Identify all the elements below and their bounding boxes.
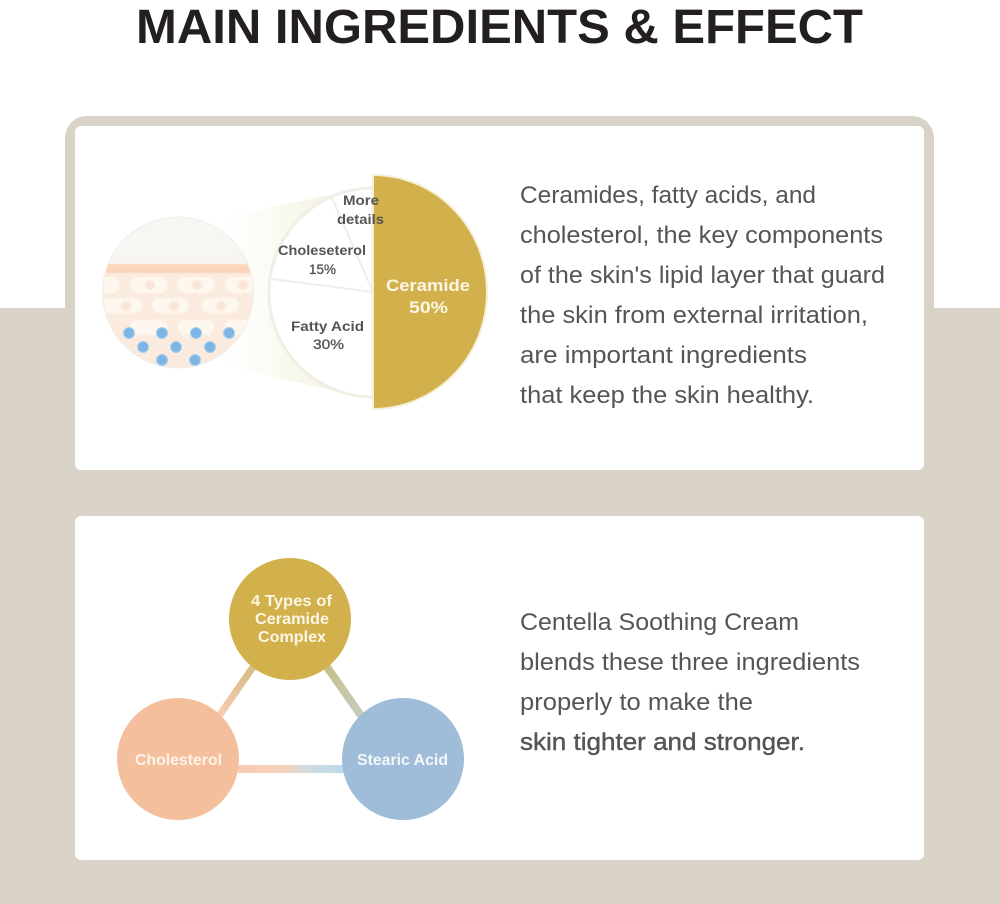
text block: blend description: blends these three ingredients [520,649,860,676]
text block: blend description: skin tighter and stronger. [520,729,805,756]
node: ceramide complex [229,558,351,680]
label: cholesterol 15%: Choleseterol [278,242,366,258]
icon: skin cross-section [102,216,254,368]
label: ceramide 50%: 50% [409,298,448,317]
text block: blend description [520,609,860,756]
text block: lipid layer description [520,182,885,409]
text block: lipid layer description: that keep the skin healthy. [520,382,814,409]
label: more details: details [337,211,384,227]
node: cholesterol [117,698,239,820]
text block: lipid layer description: the skin from external irritation, [520,302,868,329]
text block: lipid layer description: cholesterol, the key components [520,222,883,249]
card background [75,126,924,470]
text block: lipid layer description: are important ingredients [520,342,807,369]
node: ceramide complex: 4 Types of [251,593,333,610]
zoom cone [225,194,334,391]
pie chart [269,175,487,409]
panel: ingredient blend [75,516,924,860]
label: fatty acid 30%: 30% [313,336,344,352]
label: more details [337,192,384,227]
label: fatty acid 30% [291,318,364,352]
label: cholesterol 15% [278,242,366,277]
panel frame [65,116,934,308]
connector: cholesterol to stearic acid [238,765,344,773]
label: more details: More [343,192,379,208]
panel: lipid layer [75,126,924,470]
node: stearic acid [342,698,464,820]
dots: moisture [124,328,234,366]
text block: lipid layer description: Ceramides, fatty acids, and [520,182,816,209]
title: MAIN INGREDIENTS & EFFECT [136,1,863,54]
node: ceramide complex: Ceramide [255,611,329,628]
label: cholesterol 15%: 15% [309,261,336,277]
node: ceramide complex: Complex [258,629,326,646]
connector: ceramide to stearic acid [327,667,362,717]
card background [75,516,924,860]
text block: blend description: Centella Soothing Cream [520,609,799,636]
node: cholesterol: Cholesterol [135,752,222,769]
text block: blend description: properly to make the [520,689,753,716]
node: stearic acid: Stearic Acid [357,752,448,769]
label: ceramide 50%: Ceramide [386,276,470,295]
label: ceramide 50% [386,276,470,317]
label: fatty acid 30%: Fatty Acid [291,318,364,334]
text block: lipid layer description: of the skin's lipid layer that guard [520,262,885,289]
connector: ceramide to cholesterol [219,667,253,716]
